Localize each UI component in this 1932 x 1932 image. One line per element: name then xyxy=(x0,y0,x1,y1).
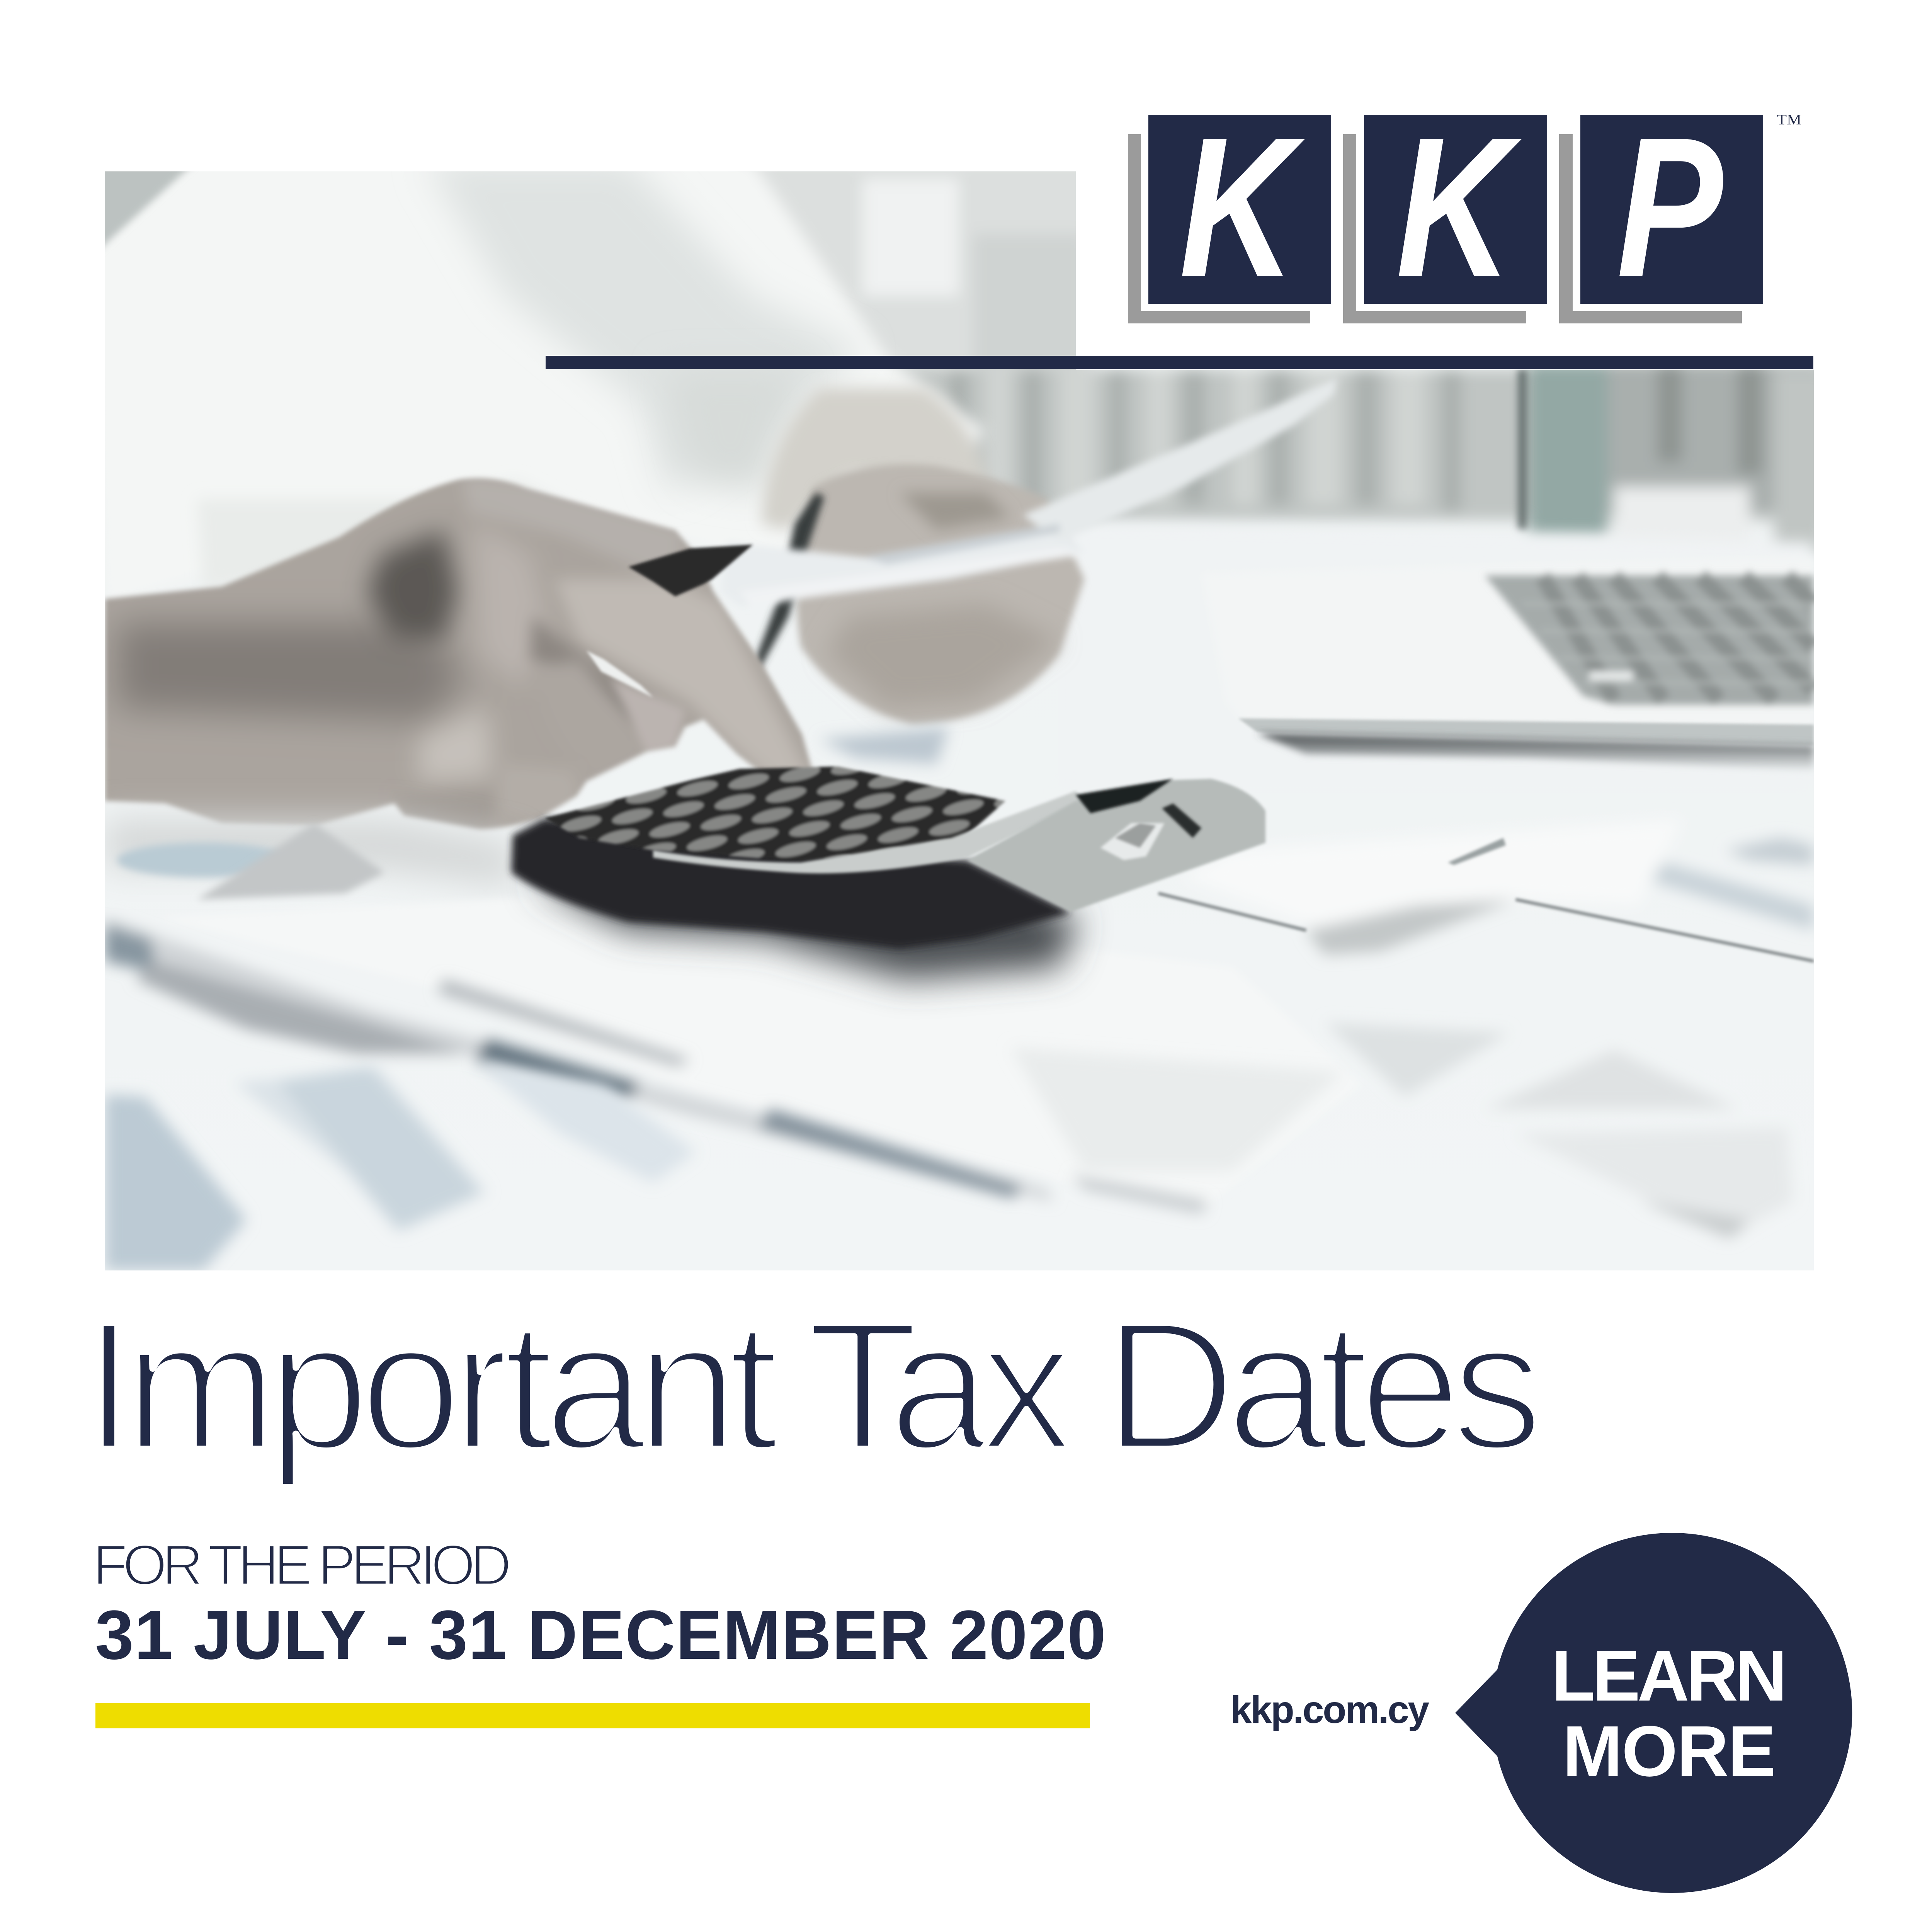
photo: sleeve fold shadow xyxy=(665,370,801,493)
date range: 31 JULY - 31 DECEMBER 2020 xyxy=(95,1596,1106,1674)
logo: trademark: TM xyxy=(1777,112,1801,128)
photo: fingers shading on back hand xyxy=(826,604,1060,709)
photo: desk surface xyxy=(105,370,1814,1270)
photo: papers in hand xyxy=(721,378,1337,606)
photo: laptop front edge and shadow xyxy=(1238,718,1814,745)
photo: hands using a calculator on a desk with papers and a laptop xyxy=(86,160,1836,1270)
photo: hand base tone xyxy=(86,468,838,838)
photo: back hand holding a receipt xyxy=(797,464,1084,724)
photo: paper tick mark xyxy=(1448,838,1506,865)
photo: laptop base xyxy=(1201,557,1814,730)
photo: calculator key panel xyxy=(545,767,1005,861)
photo: laptop keyboard xyxy=(1485,575,1814,705)
photo: shirt crease lines xyxy=(197,481,592,592)
photo: calculator cut-out grey xyxy=(1115,823,1156,848)
speech bubble shape xyxy=(1455,1533,1852,1893)
yellow bar xyxy=(95,1703,1090,1728)
photo: index finger xyxy=(554,579,820,795)
title: Important Tax Dates xyxy=(83,1282,1543,1489)
website link: kkp.com.cy xyxy=(1230,1688,1429,1731)
photo: calculator bright lower rim xyxy=(653,791,1084,873)
photo: knuckle highlight xyxy=(474,524,554,684)
photo: large centre paper xyxy=(160,893,1362,1205)
photo: window frame xyxy=(1518,370,1527,530)
photo: shirt folds xyxy=(425,160,862,493)
logo: grey shadow frames xyxy=(1128,134,1742,323)
photo: front hand pressing the calculator xyxy=(86,468,838,838)
photo: blurred window background xyxy=(739,160,1836,554)
photo: shirt corner shadow xyxy=(86,160,197,261)
photo: calculator grey wedge xyxy=(967,779,1265,912)
photo: triangle paper xyxy=(197,823,384,900)
photo: desk paper edge lines xyxy=(1158,893,1814,961)
photo: knuckle dark blob xyxy=(367,530,458,641)
photo: calculator dark body xyxy=(511,818,1071,949)
photo: valley between fingers xyxy=(530,616,653,727)
photo: back forearm xyxy=(762,388,990,530)
photo: calculator display strip xyxy=(1076,779,1173,813)
logo: KKP xyxy=(1128,96,1801,323)
photo: right foreground papers xyxy=(1183,820,1814,955)
photo: shadow beneath hand xyxy=(105,820,517,887)
photo: knuckles on back hand xyxy=(900,493,1010,530)
photo: white shirt xyxy=(86,160,986,604)
photo: mid shadow band xyxy=(117,622,468,721)
photo: calculator soft shadow xyxy=(530,875,1078,980)
subtitle: for the period: FOR THE PERIOD xyxy=(93,1533,512,1597)
learn more text: MORE xyxy=(1563,1711,1776,1791)
photo: gap between fingers xyxy=(587,651,653,697)
photo: pen xyxy=(628,545,753,596)
photo: light palm patch xyxy=(419,709,493,782)
photo: pale pie chart sections xyxy=(1010,1023,1793,1238)
photo: laptop shadow xyxy=(1257,733,1814,770)
photo: stacked paper edges xyxy=(105,918,1208,1214)
photo: pinky base xyxy=(499,764,579,823)
photo: pale table top xyxy=(1060,524,1814,789)
photo: small finger xyxy=(610,678,685,754)
photo: watch strap xyxy=(754,493,824,668)
learn more text: LEARN xyxy=(1551,1636,1787,1716)
logo: tile P: P xyxy=(1617,96,1724,318)
photo: bar chart printed on paper xyxy=(105,727,949,1270)
logo: tile K: K xyxy=(1179,96,1307,318)
learn more text xyxy=(1551,1636,1787,1791)
horizontal navy rule xyxy=(546,356,1813,369)
photo: lower ring finger xyxy=(394,791,499,838)
logo: tile K second: K xyxy=(1396,96,1524,318)
callout: learn more speech bubble xyxy=(1455,1533,1852,1893)
photo: pie chart on paper xyxy=(117,843,289,878)
photo: upper finger xyxy=(462,474,684,585)
photo: calculator slot xyxy=(1162,803,1201,838)
photo: calculator solar cut-out light xyxy=(1100,823,1165,860)
photo: middle finger xyxy=(530,659,647,781)
